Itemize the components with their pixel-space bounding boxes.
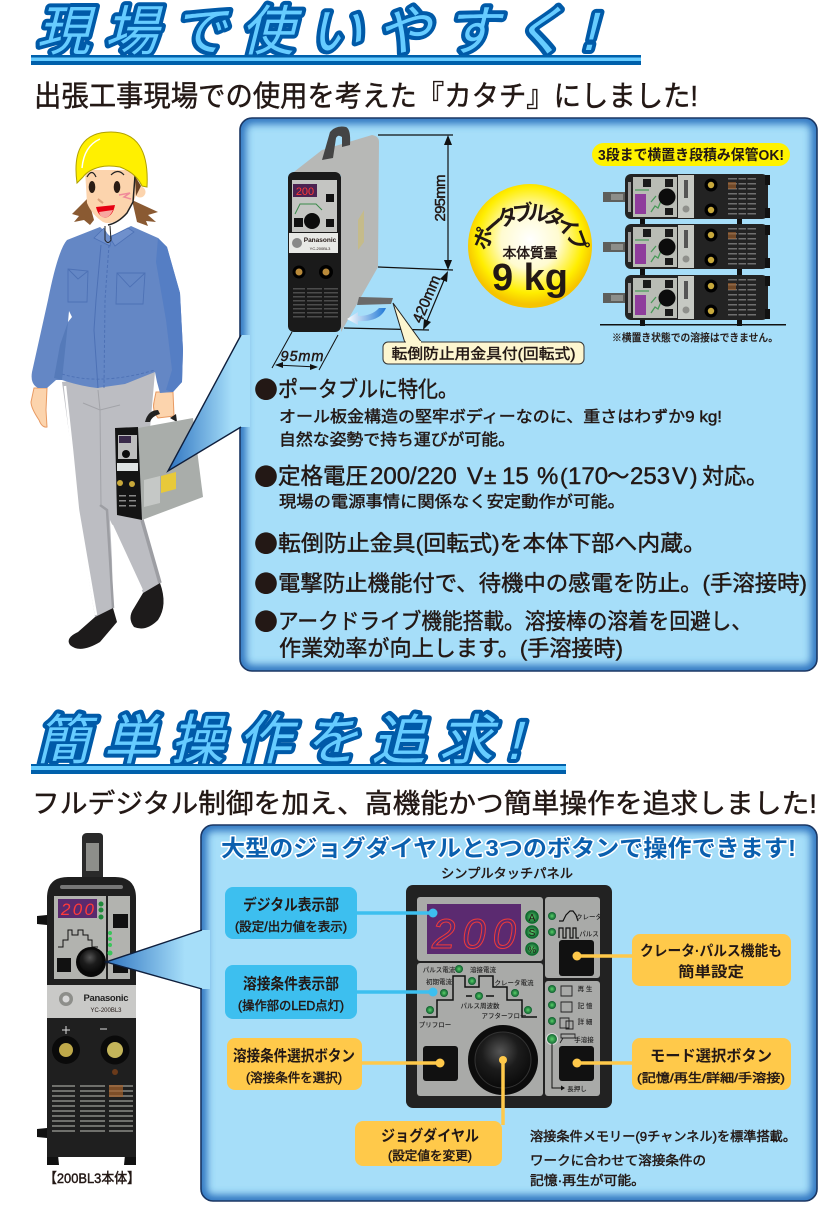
dimension: 295mm: 295mm [432, 174, 449, 222]
callout pointer to panel [168, 335, 250, 471]
callout: jog dial [355, 1056, 507, 1166]
welder handle [322, 127, 350, 160]
welding condition section: プリフロー [419, 1021, 451, 1029]
display section: S [529, 928, 536, 939]
feature detail 2: 自然な姿勢で持ち運びが可能。 [279, 431, 515, 449]
feature: bracket [254, 524, 706, 559]
feature: voltage: ● [254, 457, 278, 492]
callout: condition select button: 溶接条件選択ボタン [233, 1046, 355, 1065]
callout: crater pulse: クレータ·パルス機能も [640, 942, 782, 960]
side knobs [37, 915, 47, 1138]
callout: mode select: モード選択ボタン [650, 1047, 772, 1065]
heading: 現場で使いやすく: 現場で使いやすく! [33, 1, 608, 62]
callout: mode select [572, 1038, 791, 1090]
right hand [154, 392, 174, 418]
product: 200BL3 front view: 200 [60, 900, 95, 919]
mode section [545, 981, 600, 1096]
display section: 200 [431, 910, 517, 957]
feature: shock protection [254, 564, 807, 599]
feature: shock protection: ● [254, 564, 278, 599]
note: memory: 記憶·再生が可能。 [530, 1173, 645, 1188]
product photo: welder: YC-200BL3 [310, 246, 331, 251]
unit 1 [603, 174, 770, 225]
left hand [31, 388, 47, 427]
display section [417, 897, 543, 961]
feature detail 1: オール板金構造の堅牢ボディーなのに、重さはわずか9 kg! [279, 407, 722, 426]
welding condition section: 溶接電流 [470, 965, 496, 974]
feature: arc drive [254, 602, 752, 637]
badge: portable type 9kg [468, 184, 592, 308]
worker helmet [76, 132, 147, 187]
subheading: 出張工事現場: 出張工事現場での使用を考えた『カタチ』にしました! [34, 80, 698, 113]
callout: condition select button [227, 1038, 444, 1090]
note: memory: ワークに合わせて溶接条件の [530, 1153, 706, 1168]
stacked welders [600, 174, 786, 326]
subheading: フルデジタル: フルデジタル制御を加え、高機能かつ簡単操作を追求しました! [32, 789, 817, 819]
callout: welding condition display [225, 965, 438, 1019]
badge: stacking [592, 143, 790, 166]
callout: crater pulse [572, 934, 791, 986]
callout: jog dial: ジョグダイヤル [381, 1126, 479, 1145]
feature: voltage [254, 457, 768, 492]
welder body side [290, 135, 379, 332]
feature: portable: ● [254, 370, 278, 405]
note: stacking: ※横置き状態での溶接はできません。 [612, 331, 778, 344]
feature: voltage: ( [560, 464, 568, 489]
sockets [52, 1036, 80, 1064]
mode section: 詳 細 [578, 1017, 593, 1026]
panel title: 大型のジョグダイヤルと3つのボタンで操作できます! [221, 835, 796, 861]
rotation arrow [347, 308, 386, 325]
tip-over bracket [357, 297, 393, 305]
badge: stacking: 3段まで横置き段積み保管OK! [598, 146, 784, 164]
welding condition section: アフターフロー [481, 1011, 527, 1020]
feature: bracket: ● [254, 524, 278, 559]
body [47, 877, 136, 1157]
feature: arc drive: アークドライブ機能搭載。溶接棒の溶着を回避し、 [278, 609, 752, 634]
worker hair right [132, 200, 158, 226]
vents [52, 1085, 133, 1132]
worker jacket [32, 226, 183, 393]
feature: voltage: 170 [568, 463, 608, 490]
dimension: 420mm: 420mm [409, 273, 444, 326]
dimension: 420mm [344, 271, 448, 330]
label: simple touch panel: シンプルタッチパネル [441, 866, 573, 881]
dimension: 95mm: 95mm [280, 349, 324, 365]
welder front [288, 172, 341, 332]
carrying handle [82, 833, 103, 877]
feature: voltage: 253 [630, 463, 670, 490]
badge: portable type 9kg: 本体質量 [502, 245, 558, 261]
feature: voltage: V [467, 463, 483, 490]
caption: 200BL3: 【200BL3本体】 [44, 1170, 140, 1186]
heading: 簡単操作を追求: 簡単操作を追求! [33, 710, 533, 771]
mode section: 記 憶 [578, 1001, 593, 1010]
product: 200BL3 front view [37, 833, 136, 1165]
callout: welding condition display: (操作部のLED点灯) [238, 998, 344, 1013]
worker hair left [72, 198, 94, 225]
feature: bracket: 転倒防止金具(回転式)を本体下部へ内蔵。 [278, 531, 706, 556]
feature: voltage: 対応。 [702, 464, 768, 489]
product photo: welder: Panasonic [304, 237, 337, 244]
callout: jog dial: (設定値を変更) [388, 1148, 472, 1163]
worker pants [62, 372, 160, 617]
product photo: welder: 200 [296, 186, 314, 198]
feature: voltage: % [537, 463, 558, 490]
panel: portable features [240, 118, 817, 671]
label: tip-over bracket: 転倒防止用金具付(回転式) [392, 346, 576, 363]
feature: voltage: 15 [502, 463, 529, 490]
note: memory: 溶接条件メモリー(9チャンネル)を標準搭載。 [530, 1129, 796, 1144]
dimension: 95mm [272, 332, 338, 370]
unit 2 [603, 224, 770, 275]
panel: simple operation [201, 825, 817, 1201]
crater and pulse section: クレータ [576, 912, 602, 921]
feature list [254, 370, 807, 661]
display section: A [529, 913, 536, 924]
note: memory [530, 1129, 796, 1188]
callout: digital display [225, 887, 438, 939]
feature: arc drive second line: 作業効率が向上します。(手溶接時) [279, 636, 623, 661]
welding condition section: パルス電流 [423, 965, 456, 974]
control panel diagram [406, 885, 612, 1108]
jog dial [468, 1025, 538, 1095]
feature detail 3: 現場の電源事情に関係なく安定動作が可能。 [279, 493, 625, 511]
feature: portable [254, 370, 458, 405]
feet [47, 1155, 136, 1165]
mode section: 長押し [567, 1084, 587, 1093]
crater and pulse section [545, 897, 602, 978]
callout: mode select: (記憶/再生/詳細/手溶接) [637, 1070, 785, 1085]
callout: digital display: デジタル表示部 [243, 895, 339, 914]
product: 200BL3 front view: YC-200BL3 [90, 1008, 122, 1014]
callout: condition select button: (溶接条件を選択) [246, 1070, 342, 1085]
welding condition section: パルス周波数 [460, 1001, 500, 1010]
worker shoes [69, 583, 164, 649]
crater and pulse section: パルス [579, 930, 599, 938]
display section: % [528, 945, 536, 955]
badge: portable type 9kg: 9 kg [492, 257, 568, 299]
dimension: 295mm [378, 135, 453, 270]
feature: arc drive: ● [254, 602, 278, 637]
label: tip-over bracket [383, 303, 584, 364]
product photo: welder [288, 127, 379, 332]
welding condition section [417, 963, 543, 1096]
small control panel [54, 896, 130, 979]
callout pointer to control panel [106, 930, 210, 989]
feature: voltage: V [672, 463, 688, 490]
welding condition section: クレータ電流 [494, 978, 534, 987]
brand label: Panasonic [84, 993, 128, 1004]
callout: crater pulse: 簡単設定 [678, 963, 744, 981]
callout: welding condition display: 溶接条件表示部 [243, 974, 339, 993]
feature: shock protection: 電撃防止機能付で、待機中の感電を防止。(手溶接時) [278, 571, 807, 596]
feature: voltage: 定格電圧 [278, 464, 368, 489]
mode section: 手溶接 [574, 1035, 594, 1044]
feature: portable: ポータブルに特化。 [278, 377, 458, 402]
feature: voltage: ± [484, 464, 496, 489]
small welder carried [115, 410, 203, 520]
feature: voltage: ) [690, 464, 698, 489]
feature: voltage: 〜 [607, 464, 630, 489]
welding condition section: 初期電流 [426, 977, 452, 986]
badge: portable type 9kg: ポータブルタイプ [474, 201, 590, 250]
illustration: worker carrying welder [31, 132, 203, 649]
callout: digital display: (設定/出力値を表示) [235, 919, 347, 934]
unit 3 [603, 275, 770, 326]
mode section: 再 生 [578, 984, 593, 993]
feature: voltage: 200/220 [370, 463, 457, 490]
worker face [85, 170, 146, 242]
